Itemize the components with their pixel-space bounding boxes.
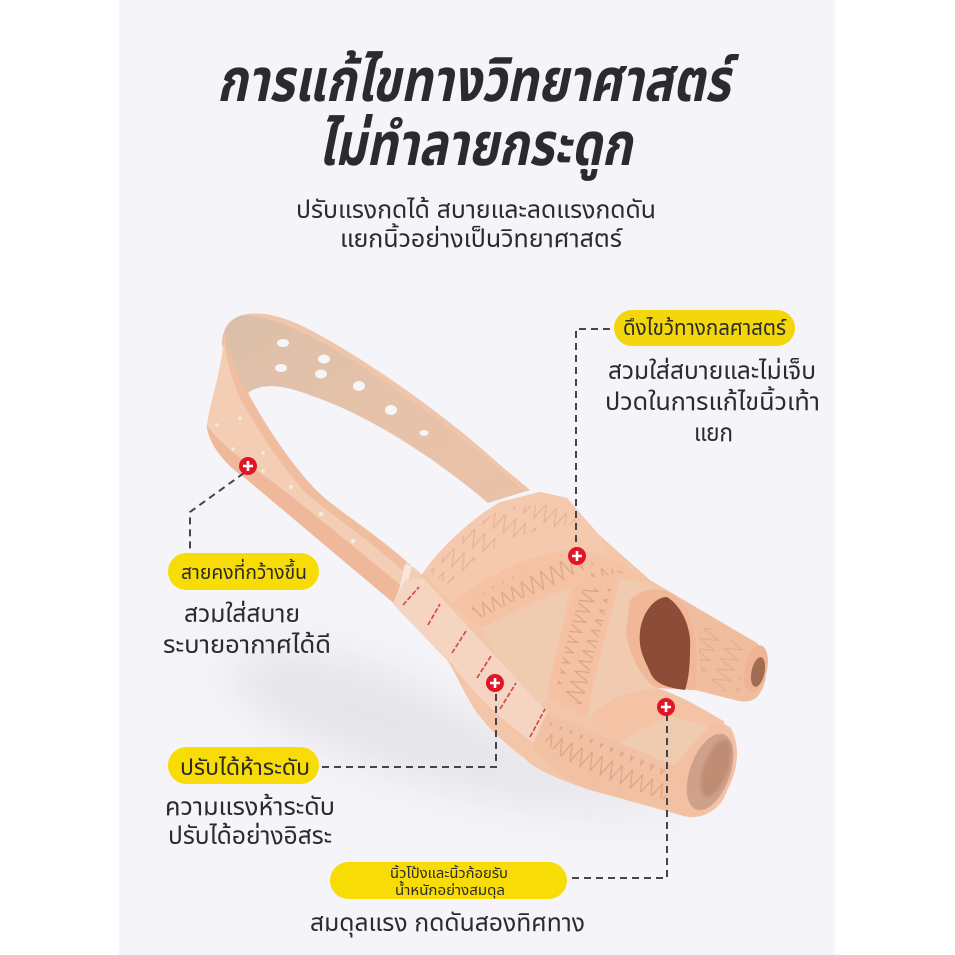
strap rim <box>243 313 530 491</box>
callout: balance: น้ำหนักอย่างสมดุล <box>395 880 505 899</box>
thumb sleeve <box>682 600 766 702</box>
strap perforations <box>215 416 355 543</box>
callout: wider strap: ระบายอากาศได้ดี <box>163 631 331 659</box>
strap upper fold <box>224 330 407 570</box>
strap front side <box>207 330 424 612</box>
callout: mechanical cross pull: ดึงไขว้ทางกลศาสตร์ <box>623 316 787 340</box>
background panel <box>119 0 835 955</box>
subtitle: แยกนิ้วอย่างเป็นวิทยาศาสตร์ <box>340 222 623 253</box>
thumb sleeve zigzag <box>696 620 745 695</box>
callout: wider strap: สวมใส่สบาย <box>184 600 300 628</box>
ground shadow <box>230 651 700 813</box>
thumb opening rim <box>626 589 697 690</box>
callout: five levels: ความแรงห้าระดับ <box>165 793 335 821</box>
bottom band zigzag <box>542 722 672 800</box>
callout: mechanical cross pull: แยก <box>694 419 733 447</box>
callout: wider strap: สายคงที่กว้างขึ้น <box>181 558 307 584</box>
main body <box>393 492 766 817</box>
strap lower textured edge <box>207 425 414 612</box>
callout: five levels: ปรับได้ห้าระดับ <box>180 755 310 780</box>
callout: balance: นิ้วโป้งและนิ้วก้อยรับ <box>390 864 508 881</box>
callout: five levels: ปรับได้อย่างอิสระ <box>168 822 332 850</box>
red stitches <box>403 587 545 737</box>
callout: balance <box>310 862 585 938</box>
product: bunion corrector brace <box>207 313 772 817</box>
toe mesh <box>617 716 710 767</box>
strap inner side <box>222 313 530 503</box>
crossing band zigzag <box>466 560 625 618</box>
diagonal band zigzag <box>556 585 612 706</box>
buckle loop <box>394 564 412 604</box>
toe cuff <box>666 724 737 817</box>
toe opening <box>678 728 742 816</box>
thumb sleeve end <box>740 643 772 695</box>
upper mesh <box>480 587 570 715</box>
callout: balance: สมดุลแรง กดดันสองทิศทาง <box>310 909 585 938</box>
callout: mechanical cross pull: ปวดในการแก้ไขนิ้วเท้า <box>605 385 820 416</box>
bottom zigzag band <box>533 713 677 810</box>
top instep band <box>423 492 607 603</box>
callout: mechanical cross pull <box>605 310 820 447</box>
mesh right <box>565 578 657 717</box>
thumb opening <box>640 597 690 690</box>
title <box>217 47 740 181</box>
top band stitching <box>430 504 580 585</box>
marker: cross band <box>568 547 586 565</box>
subtitle: ปรับแรงกดได้ สบายและลดแรงกดดัน <box>296 196 656 224</box>
callout: five levels <box>165 747 335 850</box>
subtitle <box>296 196 656 253</box>
marker: strap <box>239 457 257 475</box>
toe band <box>590 688 725 767</box>
callout: mechanical cross pull: สวมใส่สบายและไม่เจ็บ <box>608 357 816 385</box>
leader lines <box>190 329 667 878</box>
crossing band <box>453 550 653 628</box>
diagonal band <box>547 578 620 717</box>
waistband strip <box>393 578 547 742</box>
strap holes <box>275 339 428 436</box>
marker: toe <box>657 698 675 716</box>
marker: waistband <box>486 674 504 692</box>
title: ไม่ทำลายกระดูก <box>318 111 634 181</box>
callout: wider strap <box>163 553 331 659</box>
title: การแก้ไขทางวิทยาศาสตร์ <box>217 47 740 114</box>
